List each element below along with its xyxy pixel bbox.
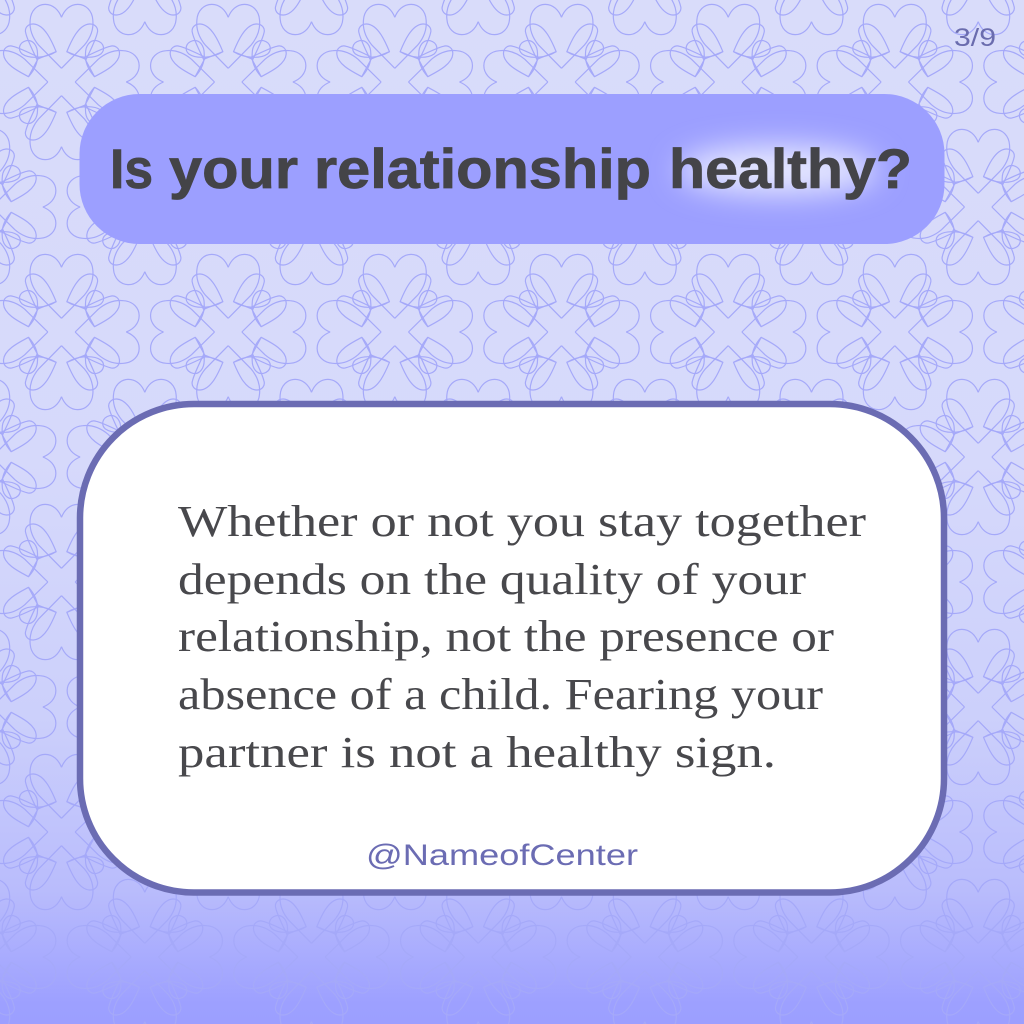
body text: absence of a child. Fearing your <box>178 670 823 719</box>
body text: partner is not a healthy sign. <box>178 728 776 777</box>
title: relationship <box>314 137 651 200</box>
title <box>110 137 912 200</box>
highlight glow behind healthy <box>678 146 878 194</box>
handle: @NameofCenter <box>366 839 638 872</box>
title: Is <box>110 137 153 200</box>
body text: depends on the quality of your <box>178 555 806 604</box>
page number: 3/9 <box>954 24 996 52</box>
body text: Whether or not you stay together <box>178 497 866 546</box>
body text: relationship, not the presence or <box>178 612 834 661</box>
panel: message card <box>80 404 944 892</box>
title: healthy? <box>669 137 912 200</box>
title: your <box>169 137 298 200</box>
body text <box>178 497 866 777</box>
panel: header pill <box>80 94 944 244</box>
